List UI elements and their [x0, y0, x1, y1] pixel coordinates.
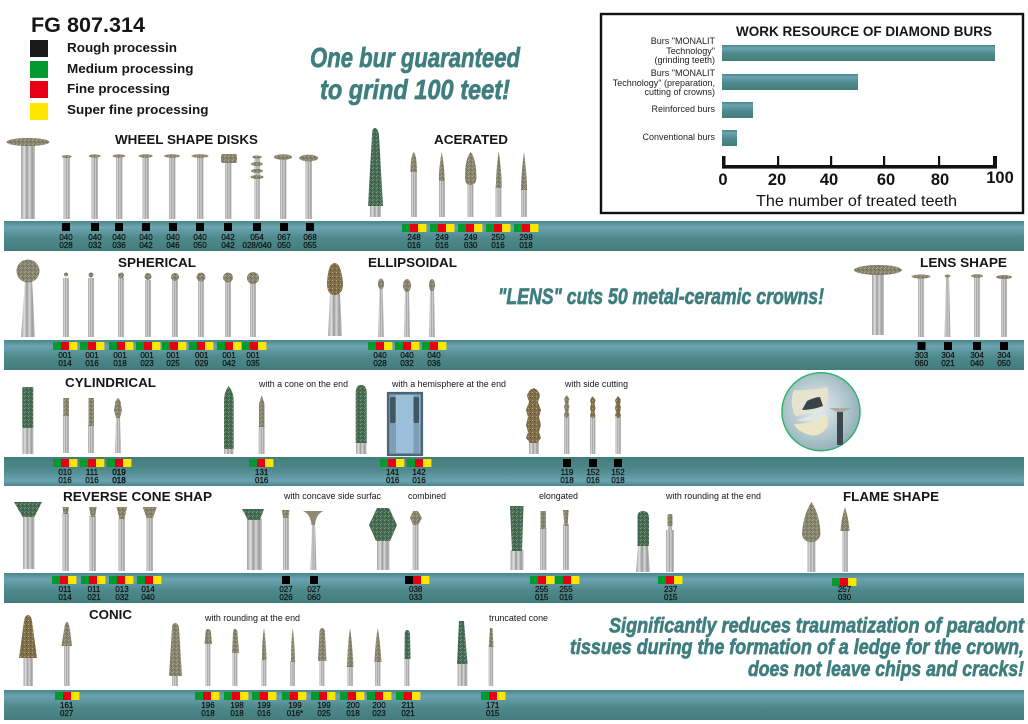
legend: medium processing: Medium processing — [67, 61, 194, 76]
burs — [457, 621, 494, 686]
codes: 040 — [139, 233, 153, 242]
codes: 016 — [85, 476, 99, 485]
codes: 304 — [997, 351, 1011, 360]
heading: with a cone on the end — [258, 379, 348, 390]
codes: 303 — [915, 351, 929, 360]
codes: 001 — [195, 351, 209, 360]
codes: 021 — [941, 359, 955, 368]
codes: 036 — [112, 241, 126, 250]
codes: 001 — [113, 351, 127, 360]
panel: spherical — [16, 255, 266, 368]
codes: 010 — [58, 468, 72, 477]
codes: 014 — [58, 359, 72, 368]
codes: 025 — [317, 709, 331, 718]
burs — [16, 260, 259, 337]
panel: ellipsoidal — [327, 255, 457, 368]
panel: lens shape — [854, 255, 1012, 368]
category labels: Technology" (preparation, — [613, 78, 715, 88]
codes: 060 — [915, 359, 929, 368]
codes: 199 — [257, 701, 271, 710]
slogan: one bur guaranteed — [310, 42, 521, 105]
axis: 100 — [986, 169, 1014, 187]
codes: 018 — [560, 476, 574, 485]
codes: 001 — [85, 351, 99, 360]
codes: 250 — [491, 233, 505, 242]
heading: ACERATED — [434, 132, 508, 147]
codes: 028 — [59, 241, 73, 250]
codes: 196 — [201, 701, 215, 710]
heading: CONIC — [89, 607, 133, 622]
burs — [356, 385, 367, 454]
panel: reverse cone shape — [14, 489, 212, 602]
codes: 141 — [386, 468, 400, 477]
icon: crown and bur medallion — [782, 373, 860, 451]
codes: 026 — [279, 593, 293, 602]
panel: acerated — [368, 128, 538, 250]
code: 161 — [60, 701, 74, 710]
heading: with rounding at the end — [204, 613, 300, 624]
codes: 021 — [87, 593, 101, 602]
category labels: Conventional burs — [642, 132, 715, 142]
band 2 — [4, 340, 1024, 370]
codes: 021 — [401, 709, 415, 718]
heading: WHEEL SHAPE DISKS — [115, 132, 258, 147]
heading: ELLIPSOIDAL — [368, 255, 457, 270]
band 4 — [4, 573, 1024, 603]
panel: cylindrical with a hemisphere at the end — [356, 379, 506, 485]
codes: 018 — [346, 709, 360, 718]
slogan: lens: "LENS" cuts 50 metal-ceramic crowns! — [498, 284, 824, 309]
codes: 050 — [193, 241, 207, 250]
codes: 040 — [88, 233, 102, 242]
codes: 011 — [88, 585, 101, 594]
codes: 249 — [435, 233, 449, 242]
codes: 028 — [373, 359, 387, 368]
codes: 042 — [222, 359, 236, 368]
code: 171 — [486, 701, 500, 710]
heading: CYLINDRICAL — [65, 375, 156, 390]
codes: 027 — [307, 585, 321, 594]
axis: 80 — [931, 171, 949, 189]
code: 015 — [664, 593, 678, 602]
panel: conic — [19, 607, 133, 718]
codes: 046 — [166, 241, 180, 250]
legend — [30, 40, 209, 120]
codes: 014 — [58, 593, 72, 602]
codes: 018 — [113, 359, 127, 368]
codes: 042 — [139, 241, 153, 250]
codes: 304 — [941, 351, 955, 360]
codes: 019 — [112, 468, 126, 477]
codes: 016 — [386, 476, 400, 485]
axis — [718, 156, 1014, 189]
panel: cylindrical with side cutting — [526, 379, 628, 485]
codes: 255 — [535, 585, 549, 594]
codes: 018 — [519, 241, 533, 250]
legend: rough processing: Rough processin — [67, 40, 177, 55]
category labels: Technology" — [666, 46, 715, 56]
codes: 036 — [427, 359, 441, 368]
panel: reverse cone combined — [369, 491, 446, 602]
codes: 050 — [277, 241, 291, 250]
codes: 199 — [317, 701, 331, 710]
codes: 111 — [86, 468, 99, 477]
panel: wheel shape disks — [6, 132, 318, 250]
codes: 040 — [373, 351, 387, 360]
heading: SPHERICAL — [118, 255, 196, 270]
codes: 018 — [611, 476, 625, 485]
code — [249, 459, 273, 485]
burs — [854, 265, 1012, 337]
heading: with side cutting — [564, 379, 628, 390]
codes: 001 — [222, 351, 236, 360]
codes: 018 — [201, 709, 215, 718]
codes: 001 — [140, 351, 154, 360]
code — [658, 576, 682, 602]
bars — [722, 45, 995, 146]
codes: 067 — [277, 233, 291, 242]
panel: cylindrical with a cone on the end — [224, 379, 348, 485]
codes: 040 — [141, 593, 155, 602]
code — [832, 578, 856, 602]
codes: 032 — [400, 359, 414, 368]
codes: 001 — [58, 351, 72, 360]
codes — [915, 342, 1011, 368]
codes: 040 — [112, 233, 126, 242]
title: FG 807.314 — [31, 13, 145, 37]
legend: fine processing — [30, 81, 170, 98]
codes: 200 — [372, 701, 386, 710]
codes — [402, 224, 538, 250]
code: 038 — [409, 585, 423, 594]
slogan: reduces traumatization — [570, 614, 1025, 681]
codes: 018 — [112, 476, 126, 485]
codes: 152 — [611, 468, 625, 477]
codes: 152 — [586, 468, 600, 477]
codes: 248 — [407, 233, 421, 242]
codes: 040 — [400, 351, 414, 360]
legend: super fine processing — [30, 102, 209, 120]
codes: 068 — [303, 233, 317, 242]
codes: 040 — [970, 359, 984, 368]
codes: 198 — [230, 701, 244, 710]
codes: 016* — [287, 709, 303, 718]
burs — [19, 615, 72, 686]
burs — [6, 138, 318, 219]
category labels: (grinding teeth) — [654, 55, 715, 65]
heading: elongated — [539, 491, 578, 502]
legend: super fine processing: Super fine processing — [67, 102, 209, 117]
code — [405, 576, 429, 602]
codes: 016 — [491, 241, 505, 250]
codes: 032 — [115, 593, 129, 602]
codes: 040 — [427, 351, 441, 360]
codes: 001 — [246, 351, 260, 360]
codes: 249 — [464, 233, 478, 242]
codes: 211 — [402, 701, 415, 710]
burs — [510, 506, 569, 570]
code: 027 — [60, 709, 74, 718]
panel: reverse cone with concave side surface — [242, 491, 381, 602]
heading: combined — [408, 491, 446, 502]
code — [55, 692, 79, 718]
codes: 013 — [115, 585, 129, 594]
slogan: one bur guaranteed: One bur guaranteed — [310, 42, 521, 73]
codes: 025 — [166, 359, 180, 368]
legend: medium processing — [30, 61, 194, 78]
heading: with a hemisphere at the end — [391, 379, 506, 390]
codes: 200 — [346, 701, 360, 710]
panel: conic with rounding at the end — [169, 613, 420, 718]
heading: with concave side surfac — [283, 491, 381, 502]
burs — [169, 623, 410, 686]
code: 016 — [255, 476, 269, 485]
codes: 054 — [250, 233, 264, 242]
code: 015 — [486, 709, 500, 718]
codes: 050 — [997, 359, 1011, 368]
chart title: WORK RESOURCE OF DIAMOND BURS — [736, 24, 992, 39]
codes: 032 — [88, 241, 102, 250]
codes: 199 — [288, 701, 302, 710]
code: 030 — [838, 593, 852, 602]
category labels: cutting of crowns) — [644, 87, 715, 97]
band 1 — [4, 221, 1024, 251]
code: 237 — [664, 585, 678, 594]
codes: 016 — [58, 476, 72, 485]
codes: 042 — [221, 233, 235, 242]
codes — [380, 459, 431, 485]
burs — [242, 509, 324, 570]
heading: FLAME SHAPE — [843, 489, 939, 504]
slogan: one bur guaranteed: to grind 100 teet! — [320, 74, 510, 105]
codes: 016 — [586, 476, 600, 485]
codes — [53, 342, 266, 368]
band 3 — [4, 457, 1024, 486]
axis: 20 — [768, 171, 786, 189]
codes — [52, 576, 161, 602]
codes — [560, 459, 625, 485]
category labels — [613, 36, 715, 142]
legend: rough processing — [30, 40, 177, 57]
burs — [802, 502, 850, 572]
codes: 040 — [59, 233, 73, 242]
codes: 040 — [193, 233, 207, 242]
codes: 014 — [141, 585, 155, 594]
codes — [530, 576, 579, 602]
codes — [59, 223, 317, 250]
panel: work resource chart — [601, 14, 1023, 213]
category labels: Burs "MONALIT — [651, 36, 715, 46]
codes: 016 — [407, 241, 421, 250]
codes — [279, 576, 321, 602]
burs — [14, 502, 157, 571]
codes — [53, 459, 131, 485]
codes: 142 — [412, 468, 426, 477]
axis: 60 — [877, 171, 895, 189]
codes: 001 — [166, 351, 180, 360]
codes: 255 — [559, 585, 573, 594]
codes: 060 — [307, 593, 321, 602]
category labels: Burs "MONALIT — [651, 68, 715, 78]
burs — [224, 386, 265, 454]
codes: 011 — [59, 585, 72, 594]
heading: LENS SHAPE — [920, 255, 1007, 270]
category labels: Reinforced burs — [651, 104, 715, 114]
panel: flame shape — [802, 489, 939, 602]
codes: 298 — [519, 233, 533, 242]
codes: 029 — [195, 359, 209, 368]
codes: 016 — [85, 359, 99, 368]
panel: reverse cone elongated — [510, 491, 579, 602]
codes: 023 — [372, 709, 386, 718]
burs — [327, 263, 435, 337]
codes: 016 — [435, 241, 449, 250]
codes: 023 — [140, 359, 154, 368]
codes: 035 — [246, 359, 260, 368]
code — [481, 692, 505, 718]
codes: 016 — [257, 709, 271, 718]
codes: 119 — [561, 468, 574, 477]
legend: fine processing: Fine processing — [67, 81, 170, 96]
panel: truncated cone — [457, 613, 548, 718]
codes: 016 — [412, 476, 426, 485]
burs — [369, 508, 422, 570]
axis title: The number of treated teeth — [756, 193, 957, 210]
axis: 0 — [718, 171, 728, 189]
heading: REVERSE CONE SHAP — [63, 489, 212, 504]
burs — [636, 511, 674, 572]
highlighted burs — [388, 393, 422, 455]
panel: reverse cone with rounding at the end — [636, 491, 761, 602]
heading: with rounding at the end — [665, 491, 761, 502]
codes — [368, 342, 446, 368]
codes: 055 — [303, 241, 317, 250]
band 5 — [4, 690, 1024, 720]
code: 257 — [838, 585, 852, 594]
codes — [195, 692, 420, 718]
codes: 015 — [535, 593, 549, 602]
codes: 018 — [230, 709, 244, 718]
burs — [368, 128, 527, 217]
code: 131 — [255, 468, 269, 477]
codes: 027 — [279, 585, 293, 594]
heading: truncated cone — [489, 613, 548, 624]
axis: 40 — [820, 171, 838, 189]
codes: 304 — [970, 351, 984, 360]
codes: 030 — [464, 241, 478, 250]
panel: cylindrical — [22, 375, 156, 485]
codes: 040 — [166, 233, 180, 242]
code: 033 — [409, 593, 423, 602]
burs — [526, 388, 621, 454]
codes: 028/040 — [243, 241, 272, 250]
burs — [22, 387, 122, 454]
codes: 016 — [559, 593, 573, 602]
codes: 042 — [221, 241, 235, 250]
